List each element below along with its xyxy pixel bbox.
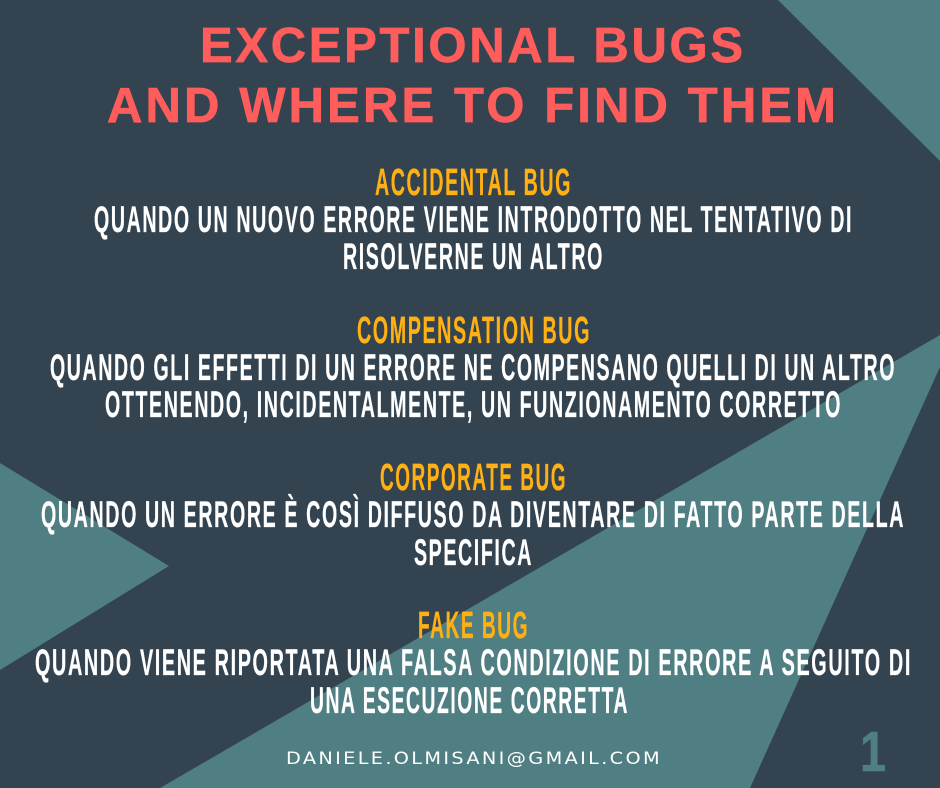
section: corporate bug: SPECIFICA xyxy=(414,532,533,573)
section: fake bug xyxy=(35,605,912,721)
section: accidental bug: RISOLVERNE UN ALTRO xyxy=(343,236,604,277)
email address: DANIELE.OLMISANI@GMAIL.COM xyxy=(286,749,662,768)
section: fake bug: FAKE BUG xyxy=(418,605,529,647)
section: corporate bug xyxy=(41,457,905,573)
page number: 1 xyxy=(860,720,886,784)
section: compensation bug xyxy=(50,310,896,425)
shape: large lower triangle xyxy=(160,335,940,788)
section: accidental bug: ACCIDENTAL BUG xyxy=(375,162,572,204)
section: accidental bug xyxy=(94,162,853,277)
shape: top right triangle xyxy=(778,0,940,161)
title: AND WHERE TO FIND THEM xyxy=(107,79,836,133)
section: compensation bug: COMPENSATION BUG xyxy=(357,310,591,352)
shape: left triangle xyxy=(0,463,169,670)
title xyxy=(107,19,836,133)
title: EXCEPTIONAL BUGS xyxy=(200,19,743,73)
section: fake bug: UNA ESECUZIONE CORRETTA xyxy=(310,680,629,721)
section: corporate bug: CORPORATE BUG xyxy=(380,457,567,499)
